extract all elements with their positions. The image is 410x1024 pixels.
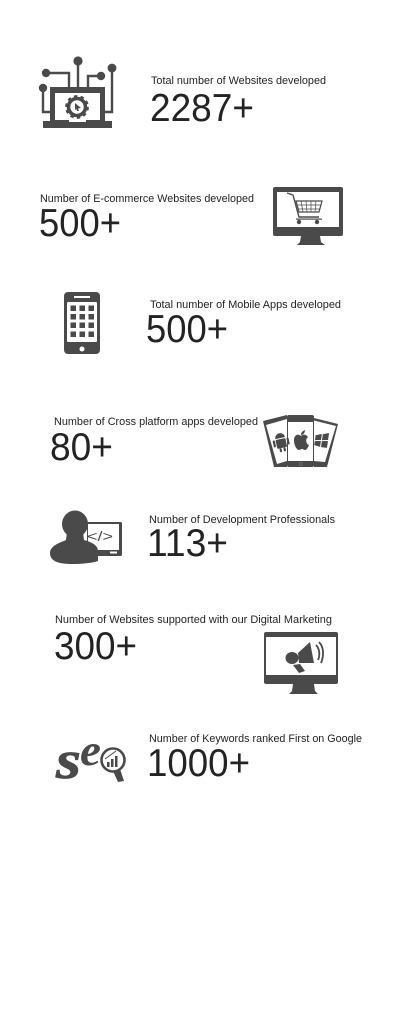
label: Number of Keywords ranked First on Google xyxy=(149,733,362,745)
stat: development professionals xyxy=(50,510,335,565)
icon: developer with code screen xyxy=(50,510,122,564)
icon: SEO with magnifier: e xyxy=(80,726,101,775)
seo letters: s xyxy=(55,730,81,790)
stat: cross platform apps xyxy=(50,415,338,469)
number: 500+ xyxy=(39,202,121,245)
label: Number of Development Professionals xyxy=(149,514,335,526)
code symbol: </> xyxy=(87,528,113,544)
stat: digital marketing xyxy=(54,614,338,694)
stat: mobile apps xyxy=(64,292,341,354)
number: 2287+ xyxy=(150,87,254,130)
number: 113+ xyxy=(147,522,228,565)
icon: monitor with megaphone xyxy=(264,632,338,694)
label: Total number of Mobile Apps developed xyxy=(150,299,341,311)
icon: monitor with shopping cart xyxy=(273,187,343,245)
stat: keywords ranked first xyxy=(55,726,362,790)
number: 80+ xyxy=(50,426,113,469)
stat: websites developed xyxy=(39,56,326,130)
number: 300+ xyxy=(54,625,137,668)
label: Number of E-commerce Websites developed xyxy=(40,193,254,205)
number: 500+ xyxy=(146,308,228,351)
icon: smartphone with app grid xyxy=(64,292,100,354)
label: Number of Cross platform apps developed xyxy=(54,416,258,428)
number: 1000+ xyxy=(147,742,250,785)
icon: laptop with circuits and gear xyxy=(39,56,116,128)
icon: SEO with magnifier xyxy=(55,726,124,790)
label: Number of Websites supported with our Digital Marketing xyxy=(55,614,332,626)
label: Total number of Websites developed xyxy=(151,75,326,87)
icon: three phones with android, apple and windows logos xyxy=(263,415,338,467)
stat: e-commerce websites xyxy=(39,187,343,245)
